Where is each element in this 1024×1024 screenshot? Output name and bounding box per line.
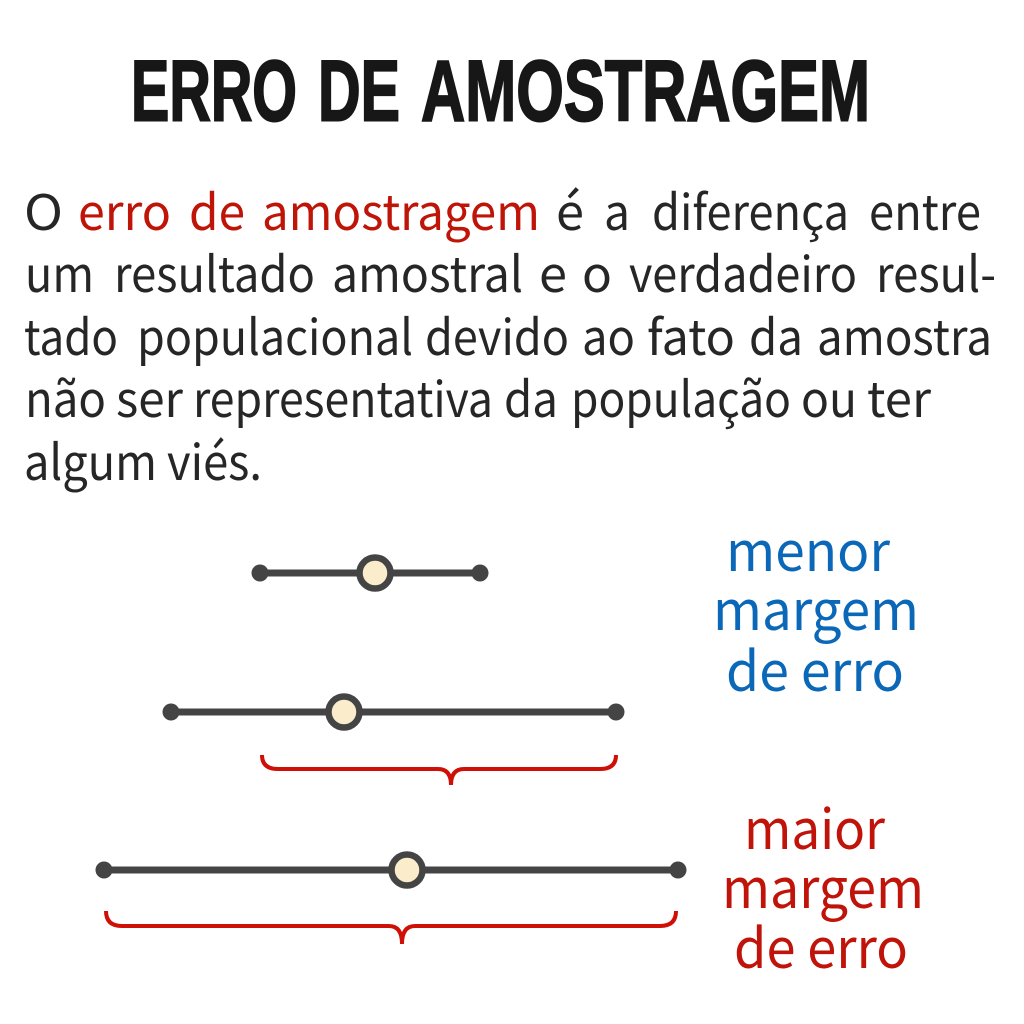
interval: narrow [252,558,488,588]
definition text: ou [801,361,857,432]
brace: wide interval [106,911,676,944]
definition text: da [504,361,558,432]
label: larger margin of error: margem [722,844,924,924]
definition text: resul- [876,236,996,307]
definition text: fato [647,299,735,370]
definition text: amostra [817,299,992,370]
definition text: um [25,236,94,307]
definition text: amostral [332,236,523,307]
label: larger margin of error: de erro [734,904,908,984]
definition text: e [539,236,567,307]
definition text: população [571,361,791,432]
title [131,50,870,134]
definition text: ao [582,299,635,370]
definition text: ter [867,361,932,432]
definition text: o [582,236,612,307]
definition text: verdadeiro [629,236,857,307]
label: smaller margin of error [713,520,919,707]
label: larger margin of error [722,795,924,984]
label: smaller margin of error: de erro [726,627,904,707]
interval: medium [162,696,624,728]
definition text: tado [24,299,118,370]
definition text: populacional [137,299,413,370]
definition text: viés. [167,424,262,495]
definition text: devido [425,299,569,370]
label: smaller margin of error: margem [713,566,919,646]
definition text: representativa [193,361,493,432]
definition text: resultado [114,236,315,307]
definition text: não [25,361,106,432]
definition text [24,180,996,495]
interval: wide [96,854,686,886]
definition text: ser [116,361,184,432]
definition text: da [749,299,803,370]
brace: medium interval [262,755,616,785]
definition text: algum [24,424,157,495]
